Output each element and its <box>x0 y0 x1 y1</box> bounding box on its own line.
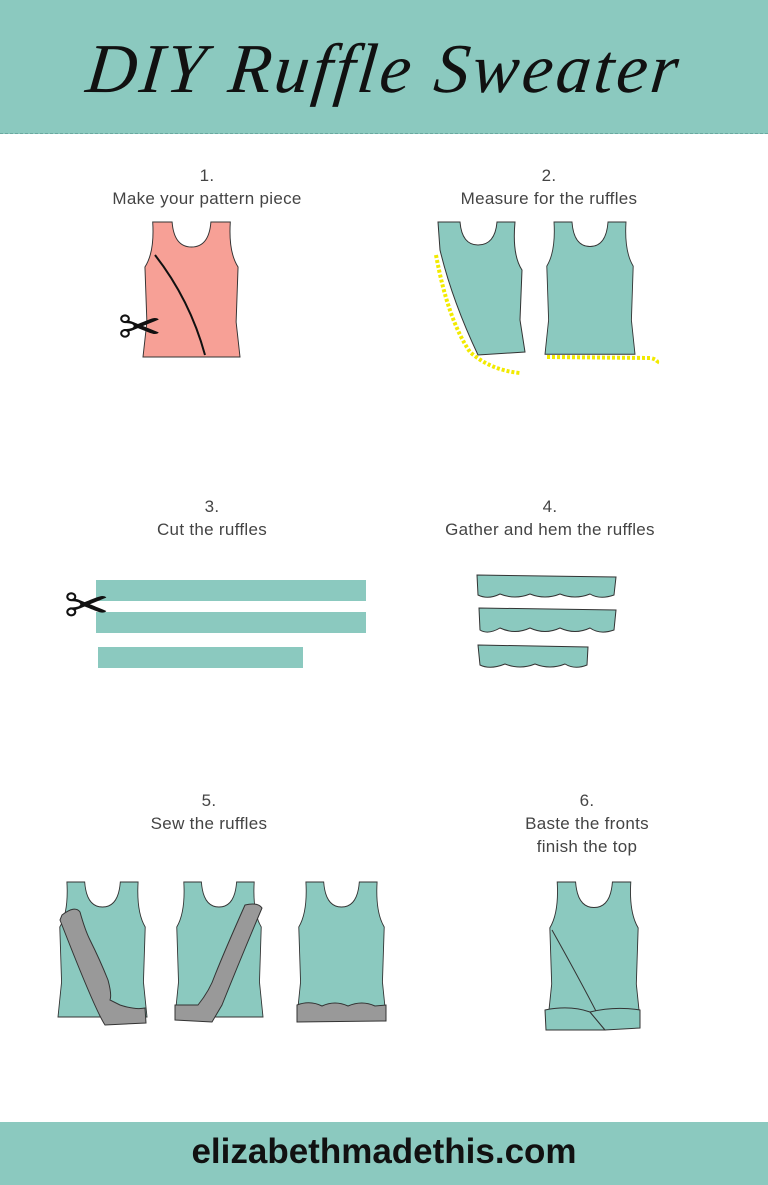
step 6 label <box>525 791 649 856</box>
step 2 label: Measure for the ruffles <box>461 189 637 208</box>
step 1: pink pattern piece with scissors <box>118 222 240 357</box>
step 6 label: Baste the fronts <box>525 814 649 833</box>
step 3 label: Cut the ruffles <box>157 520 267 539</box>
footer website: elizabethmadethis.com <box>191 1132 577 1171</box>
step 6: finished top <box>545 882 640 1030</box>
step 4 label: Gather and hem the ruffles <box>445 520 655 539</box>
header banner <box>0 0 768 134</box>
step 3 label <box>157 497 267 539</box>
step 1: pink pattern piece with scissors: ✂ <box>118 299 162 357</box>
step 5: sewn ruffle pieces <box>58 882 386 1025</box>
step 5 label: 5. <box>202 791 216 810</box>
step 4 label <box>445 497 655 539</box>
step 2: measured pieces with tape <box>436 222 657 373</box>
step 1 label: 1. <box>200 166 214 185</box>
step 5 label: Sew the ruffles <box>151 814 267 833</box>
step 2 label: 2. <box>542 166 556 185</box>
step 5 label <box>151 791 267 833</box>
step 1 label <box>112 166 302 208</box>
step 3 label: 3. <box>205 497 219 516</box>
step 4: gathered ruffles <box>477 575 616 667</box>
step 2 label <box>461 166 637 208</box>
step 6 label: 6. <box>580 791 594 810</box>
step 3: ruffle strips with scissors: ✂ <box>64 576 109 636</box>
title: DIY Ruffle Sweater <box>83 31 685 108</box>
step 3: ruffle strips with scissors <box>64 576 366 668</box>
step 1 label: Make your pattern piece <box>112 189 302 208</box>
footer banner <box>0 1122 768 1185</box>
step 4 label: 4. <box>543 497 557 516</box>
step 6 label: finish the top <box>537 837 637 856</box>
